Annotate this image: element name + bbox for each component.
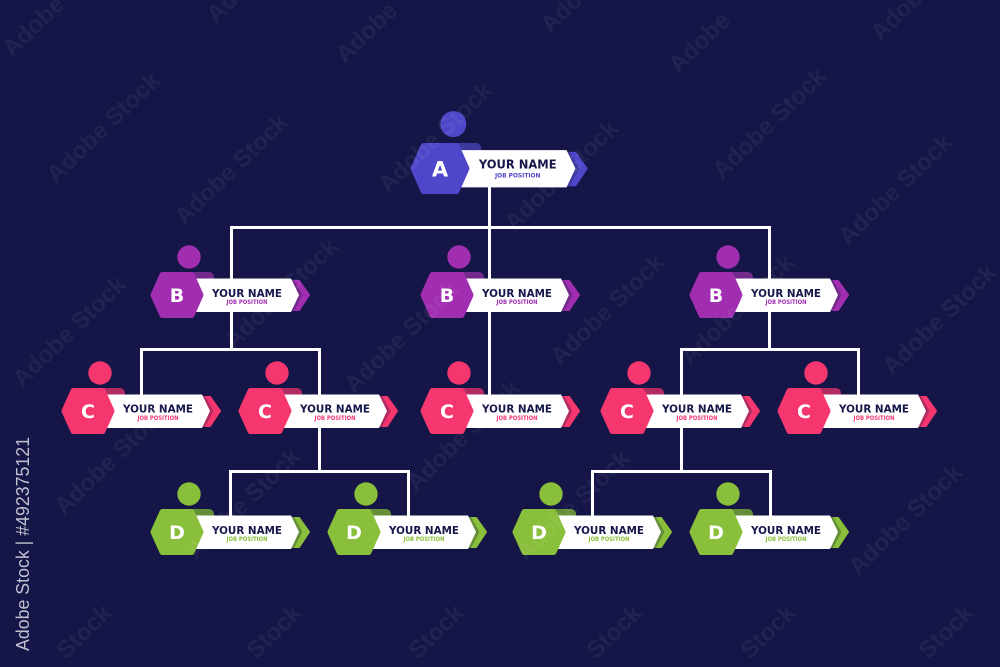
chevron shadow <box>466 517 480 548</box>
avatar <box>177 482 214 533</box>
node: D 4 <box>692 482 848 552</box>
name: YOUR NAME <box>299 402 370 416</box>
name ribbon <box>821 394 926 428</box>
watermark pattern: Stock <box>403 599 470 664</box>
name ribbon <box>194 516 299 549</box>
hexagon <box>780 391 828 431</box>
node: C 4 <box>604 361 759 431</box>
watermark pattern: Adobe Stock <box>181 443 306 564</box>
watermark pattern: Adobe Stock <box>499 115 624 236</box>
back chevron <box>198 397 220 426</box>
watermark pattern: Adobe Stock <box>675 249 800 370</box>
chevron shadow <box>289 517 302 548</box>
watermark pattern: Adobe Stock <box>339 277 464 398</box>
position: JOB POSITION <box>765 300 807 306</box>
avatar <box>177 245 214 296</box>
hexagon <box>424 275 470 315</box>
name ribbon <box>733 516 838 549</box>
back chevron <box>737 397 759 426</box>
hexagon letter: B <box>440 285 454 307</box>
avatar <box>88 361 125 412</box>
watermark pattern: Stock <box>51 599 118 664</box>
node: B centre <box>424 245 579 315</box>
watermark pattern: Stock <box>241 599 308 664</box>
position: JOB POSITION <box>403 537 445 543</box>
back chevron <box>375 397 397 426</box>
position: JOB POSITION <box>853 416 895 422</box>
chevron shadow <box>377 396 390 427</box>
name: YOUR NAME <box>750 287 821 300</box>
name ribbon <box>644 394 749 428</box>
avatar <box>440 111 481 170</box>
position: JOB POSITION <box>496 416 538 422</box>
position: JOB POSITION <box>588 537 630 543</box>
hexagon <box>516 512 562 552</box>
node: C 2 <box>242 361 397 431</box>
hexagon letter: C <box>258 401 272 423</box>
avatar <box>265 361 302 412</box>
node: D 1 <box>154 482 309 552</box>
chevron shadow <box>289 280 302 311</box>
watermark pattern: Adobe Stock <box>373 77 498 198</box>
name ribbon <box>464 394 569 428</box>
hexagon letter: D <box>531 522 547 544</box>
position: JOB POSITION <box>676 416 718 422</box>
name: YOUR NAME <box>481 287 552 300</box>
avatar <box>716 245 753 296</box>
hexagon <box>242 391 288 431</box>
name: YOUR NAME <box>573 524 644 537</box>
node: B right <box>692 245 848 315</box>
back chevron <box>826 281 848 310</box>
watermark pattern: Adobe Stock <box>7 271 132 392</box>
hexagon <box>414 146 466 191</box>
position: JOB POSITION <box>314 416 356 422</box>
name: YOUR NAME <box>122 402 193 416</box>
chevron shadow <box>651 517 664 548</box>
name ribbon <box>733 278 838 312</box>
watermark pattern: Adobe Stock <box>843 459 968 580</box>
node: C 1 <box>64 361 220 431</box>
back chevron <box>287 518 309 547</box>
chevron shadow <box>828 280 842 311</box>
avatar <box>716 482 753 533</box>
back chevron <box>464 518 486 547</box>
watermark pattern: Adobe Stock <box>877 259 1000 380</box>
name: YOUR NAME <box>750 524 821 537</box>
hexagon letter: C <box>440 401 454 423</box>
avatar <box>447 245 484 296</box>
node: C 5 <box>780 361 936 431</box>
hexagon letter: C <box>620 401 634 423</box>
watermark pattern: Adobe Stock <box>41 67 166 188</box>
avatar <box>627 361 664 412</box>
hexagon letter: A <box>432 156 449 181</box>
hexagon <box>424 391 470 431</box>
watermark pattern: Adobe Stock <box>511 445 636 566</box>
chevron shadow <box>200 396 214 427</box>
name ribbon <box>105 394 210 428</box>
name ribbon <box>464 278 569 312</box>
position: JOB POSITION <box>496 300 538 306</box>
back chevron <box>287 281 309 310</box>
hexagon letter: D <box>169 522 185 544</box>
hexagon letter: B <box>170 285 184 307</box>
chevron shadow <box>828 517 842 548</box>
avatar <box>539 482 576 533</box>
hexagon letter: C <box>797 401 811 423</box>
chevron shadow <box>559 396 572 427</box>
hexagon letter: D <box>346 522 362 544</box>
back chevron <box>557 281 579 310</box>
name: YOUR NAME <box>211 524 282 537</box>
avatar <box>447 361 484 412</box>
avatar <box>804 361 841 412</box>
hexagon <box>330 512 378 552</box>
back chevron <box>914 397 936 426</box>
position: JOB POSITION <box>494 171 540 179</box>
hexagon <box>692 275 740 315</box>
name: YOUR NAME <box>661 402 732 416</box>
hexagon <box>64 391 112 431</box>
hexagon <box>154 275 200 315</box>
chevron shadow <box>564 152 579 186</box>
back chevron <box>649 518 671 547</box>
hexagon letter: C <box>81 401 95 423</box>
name ribbon <box>282 394 387 428</box>
hexagon <box>154 512 200 552</box>
watermark pattern: Stock <box>735 599 802 664</box>
name ribbon <box>371 516 476 549</box>
stock id label: Adobe Stock | #492375121 <box>13 437 33 651</box>
node: D 2 <box>330 482 486 552</box>
chevron shadow <box>739 396 752 427</box>
node: A <box>414 111 587 191</box>
chevron shadow <box>559 280 572 311</box>
hexagon letter: D <box>708 522 724 544</box>
hexagon <box>604 391 650 431</box>
position: JOB POSITION <box>226 537 268 543</box>
chevron shadow <box>916 396 930 427</box>
node: B left <box>154 245 309 315</box>
name: YOUR NAME <box>388 524 459 537</box>
connector lines <box>142 187 858 520</box>
watermark pattern: Adobe Stock <box>219 233 344 354</box>
name ribbon <box>459 150 575 187</box>
name: YOUR NAME <box>478 157 557 171</box>
hexagon <box>692 512 740 552</box>
watermark pattern: Stock <box>913 599 980 664</box>
hexagon letter: B <box>709 285 723 307</box>
position: JOB POSITION <box>226 300 268 306</box>
watermark pattern: Adobe Stock <box>401 375 526 496</box>
watermark pattern: Stock <box>581 599 648 664</box>
back chevron <box>557 397 579 426</box>
back chevron <box>826 518 848 547</box>
position: JOB POSITION <box>765 537 807 543</box>
watermark pattern: Adobe Stock <box>833 129 958 250</box>
name: YOUR NAME <box>838 402 909 416</box>
avatar <box>354 482 391 533</box>
node: D 3 <box>516 482 671 552</box>
watermark pattern: Adobe Stock <box>169 109 294 230</box>
name: YOUR NAME <box>211 287 282 300</box>
name: YOUR NAME <box>481 402 552 416</box>
watermark pattern: Adobe Stock <box>707 63 832 184</box>
node: C 3 <box>424 361 579 431</box>
name ribbon <box>556 516 661 549</box>
name ribbon <box>194 278 299 312</box>
position: JOB POSITION <box>137 416 179 422</box>
watermark pattern: Adobe <box>663 7 736 78</box>
watermark pattern: Adobe Stock <box>545 249 670 370</box>
watermark pattern: Adobe Stock <box>49 399 174 520</box>
back chevron <box>562 153 587 185</box>
